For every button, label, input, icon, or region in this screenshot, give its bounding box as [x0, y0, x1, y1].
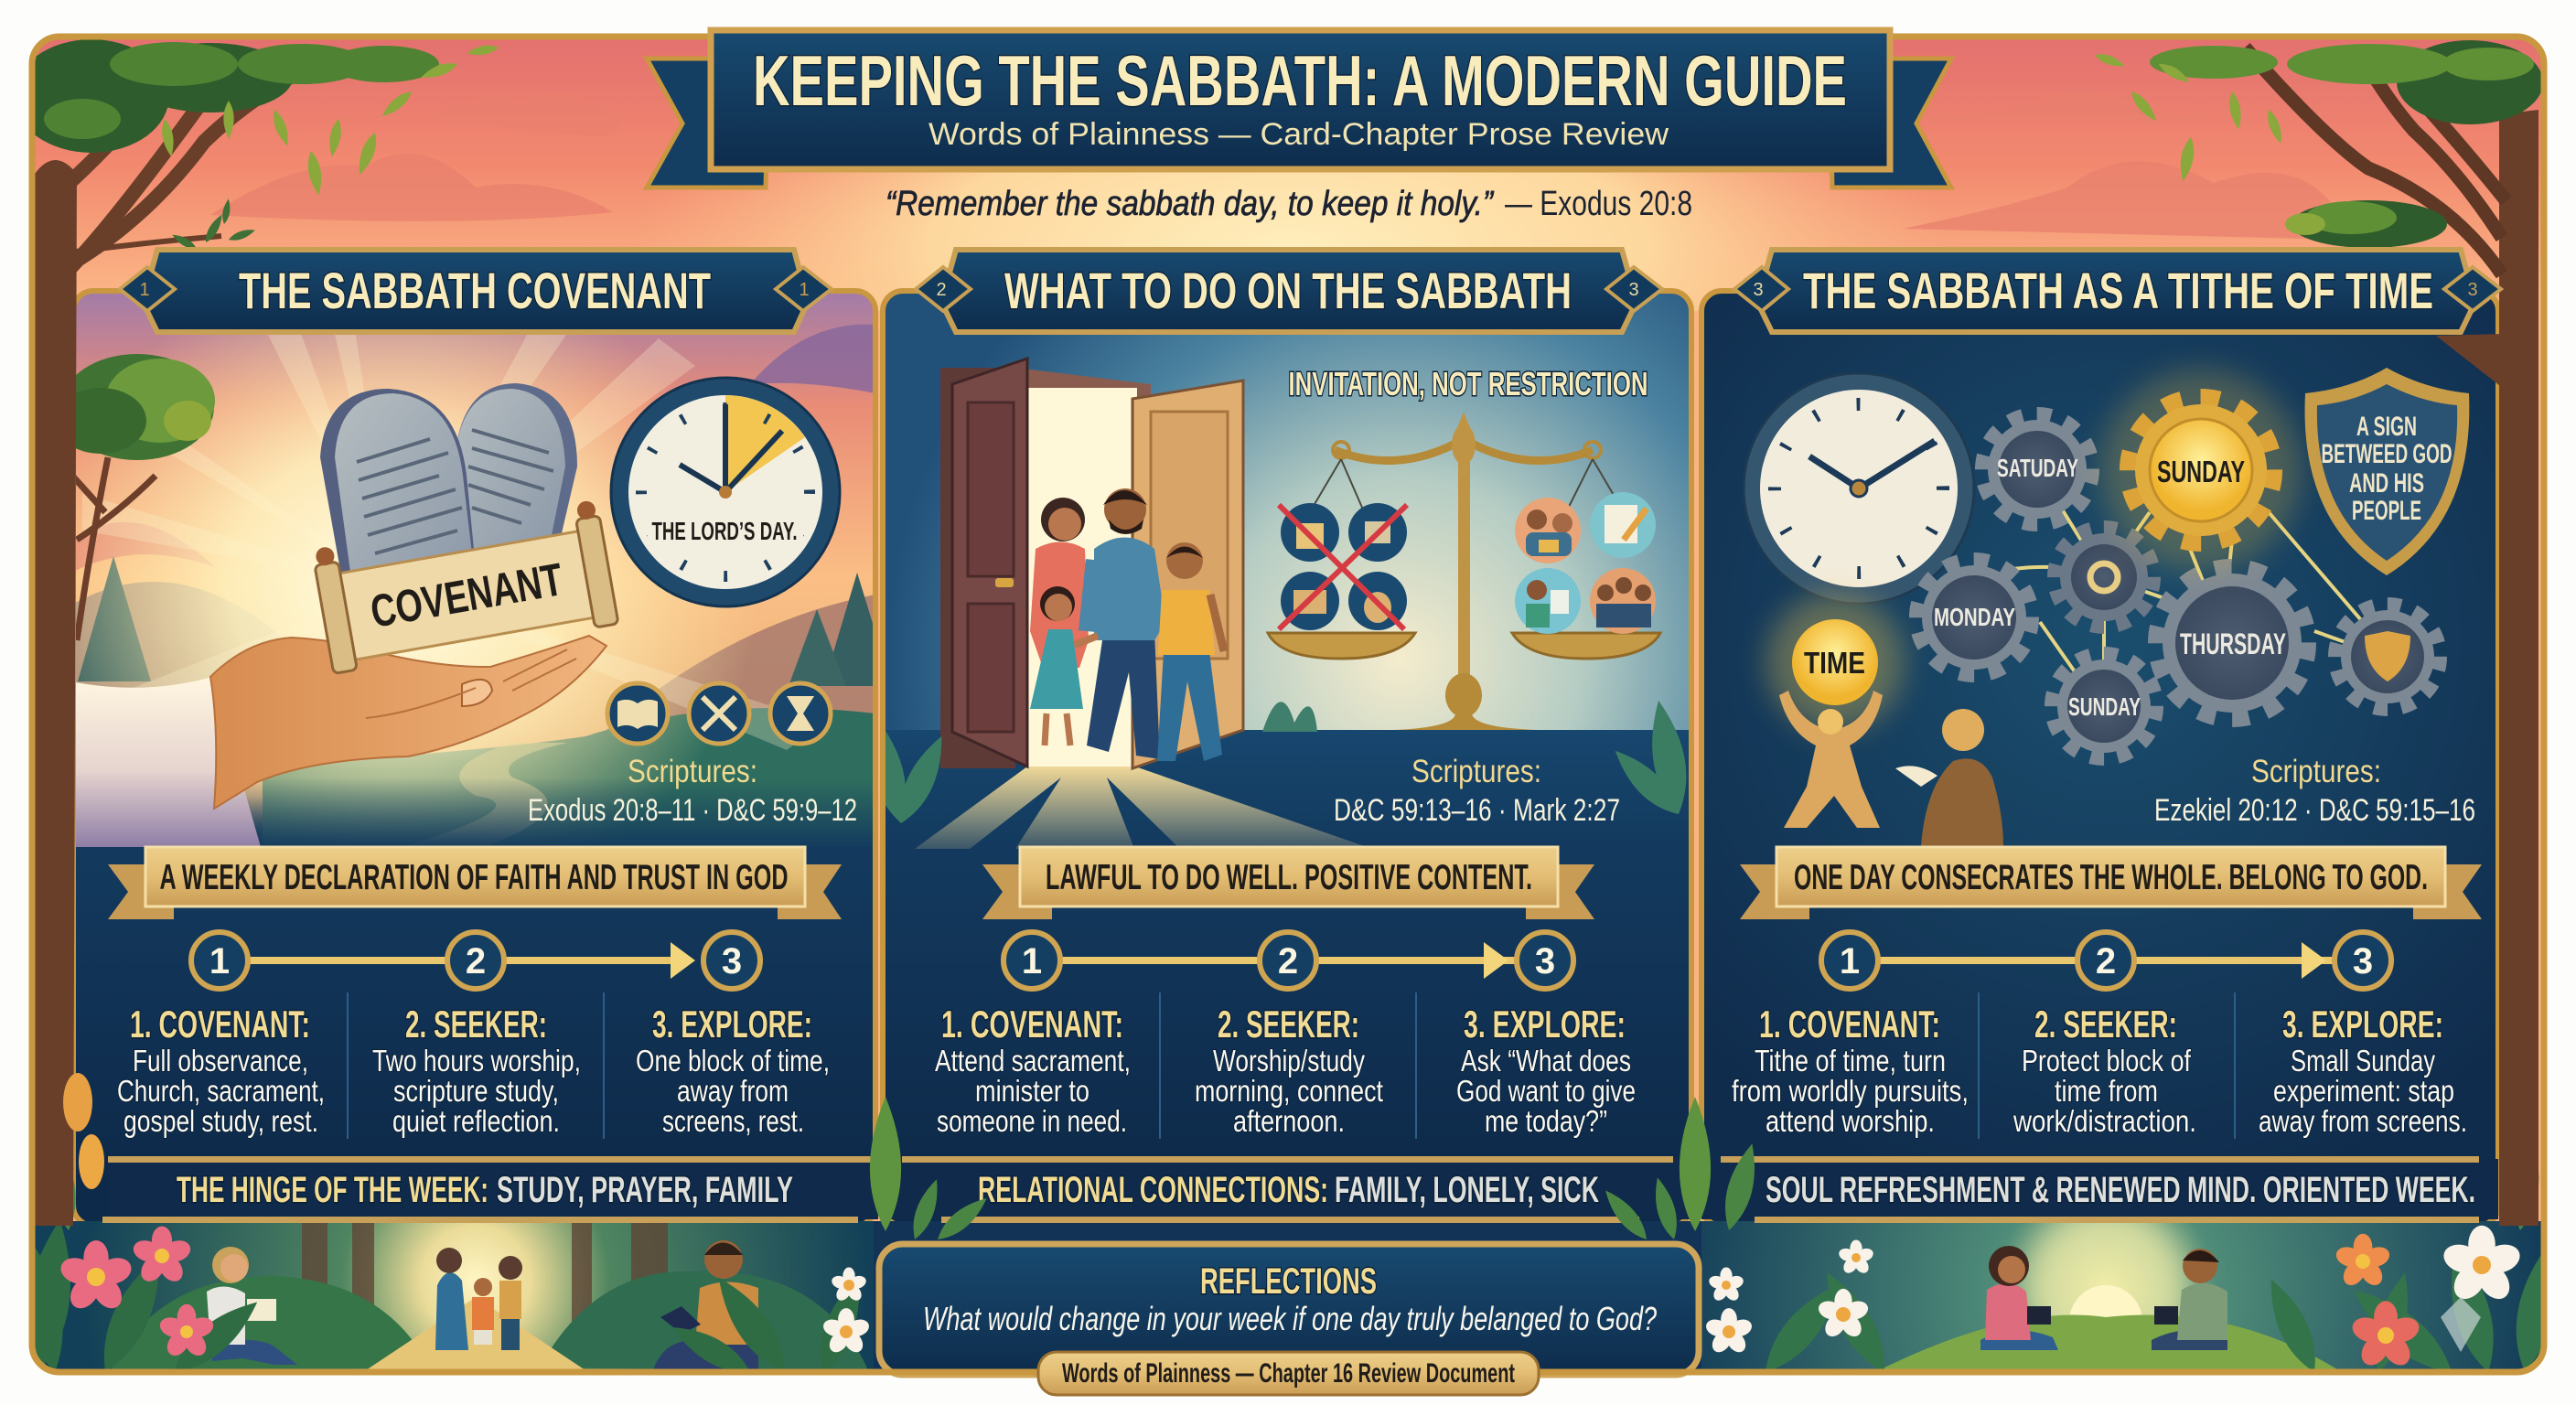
- steps: panel 3: Small Sunday: [2291, 1044, 2435, 1078]
- icon: gear blank: [2055, 528, 2153, 627]
- heading: the sabbath as a tithe of time: 3: [1753, 280, 1764, 300]
- heading: the sabbath as a tithe of time: [1734, 250, 2501, 332]
- steps: panel 3: work/distraction.: [2012, 1104, 2196, 1138]
- steps: panel 3: Protect block of: [2022, 1044, 2192, 1078]
- girl: [1030, 586, 1098, 745]
- steps: panel 3: experiment: stap: [2273, 1074, 2454, 1108]
- steps: panel 3: 3: [2353, 941, 2373, 981]
- bottom scene: forest family: [35, 1221, 874, 1368]
- steps: panel 2: [935, 932, 1636, 1139]
- scriptures text: [528, 754, 857, 828]
- steps: panel 3: time from: [2055, 1074, 2158, 1108]
- steps: panel 1: 1: [209, 941, 230, 981]
- scriptures text: Scriptures:: [2251, 754, 2381, 789]
- steps: panel 1: screens, rest.: [662, 1104, 804, 1138]
- icon: gear thursday: THURSDAY: [2180, 627, 2286, 660]
- person reading left: [207, 1247, 297, 1365]
- info strip: panel 2: RELATIONAL CONNECTIONS:: [978, 1170, 1328, 1210]
- icon: door: [940, 359, 1243, 768]
- icon: gear sunday gold: [2100, 370, 2302, 571]
- panel: what to do on the sabbath: [856, 291, 1694, 1226]
- reflections box: What would change in your week if one day truly belanged to God?: [923, 1300, 1657, 1337]
- steps: panel 2: someone in need.: [937, 1104, 1127, 1138]
- ribbon: weekly declaration: [108, 847, 842, 919]
- heading: the sabbath covenant: 1: [799, 280, 810, 300]
- scriptures text: Ezekiel 20:12 · D&C 59:15–16: [2154, 793, 2475, 828]
- icon: clock with Lord's day wedge: [611, 378, 840, 606]
- steps: panel 3: 2: [2096, 941, 2116, 981]
- icon: figure lifting time: [1766, 594, 1904, 828]
- heading: what to do on the sabbath: WHAT TO DO ON THE SABBATH: [1004, 262, 1572, 319]
- heading: the sabbath covenant: [120, 250, 832, 332]
- scriptures text: Scriptures:: [1411, 754, 1541, 789]
- scene: doorway and scale: [856, 291, 1694, 849]
- scripture quote: “Remember the sabbath day, to keep it holy.”: [886, 185, 1495, 223]
- steps: panel 2: 2: [1278, 941, 1298, 981]
- icon: hand and sleeve: [76, 636, 606, 847]
- icon: crossed tools badge: [689, 683, 749, 744]
- footer pill: Words of Plainness — Chapter 16 Review Document: [1062, 1358, 1515, 1389]
- scriptures text: Exodus 20:8–11 · D&C 59:9–12: [528, 793, 857, 828]
- icon: gear sunday small: SUNDAY: [2068, 692, 2141, 721]
- steps: panel 3: attend worship.: [1766, 1104, 1935, 1138]
- steps: panel 1: 2. SEEKER:: [405, 1003, 547, 1046]
- info strip: panel 1: STUDY, PRAYER, FAMILY: [497, 1170, 793, 1210]
- right tree: [2093, 40, 2543, 1226]
- steps: panel 1: 3. EXPLORE:: [652, 1003, 812, 1046]
- icon: gear sunday small: [2052, 654, 2156, 758]
- panel: the sabbath covenant: [27, 265, 892, 1226]
- info strip: panel 2: [883, 1156, 1692, 1223]
- steps: panel 1: 3: [722, 941, 742, 981]
- icon: open book badge: [607, 683, 668, 744]
- family on path: [435, 1248, 522, 1350]
- steps: panel 2: Ask “What does: [1461, 1044, 1631, 1078]
- steps: panel 1: Church, sacrament,: [117, 1074, 325, 1108]
- heading: what to do on the sabbath: 3: [1628, 280, 1639, 300]
- icon: gear with shield: [2335, 605, 2440, 709]
- steps: panel 1: scripture study,: [393, 1074, 559, 1108]
- steps: panel 2: afternoon.: [1233, 1104, 1345, 1138]
- icon: family walking through door: [1030, 488, 1224, 761]
- icon: gear monday: MONDAY: [1934, 603, 2015, 631]
- icon: wall clock: [1744, 373, 1974, 604]
- info strip: panel 3: [1701, 1156, 2498, 1223]
- steps: panel 3: 2. SEEKER:: [2034, 1003, 2177, 1046]
- steps: panel 2: 3: [1535, 941, 1555, 981]
- heading: the sabbath covenant: 1: [139, 280, 150, 300]
- steps: panel 2: minister to: [975, 1074, 1089, 1108]
- icon: gear saturday: SATUDAY: [1997, 454, 2078, 482]
- steps: panel 3: 1. COVENANT:: [1759, 1003, 1940, 1046]
- icon: connecting lines between gears: [2012, 469, 2378, 713]
- icon: plants: [856, 698, 1694, 829]
- person reading right: [653, 1240, 758, 1370]
- scroll label: COVENANT: [367, 553, 566, 638]
- ribbon: one day consecrates: [1740, 847, 2482, 919]
- info strip: panel 2: FAMILY, LONELY, SICK: [1335, 1170, 1599, 1210]
- title ribbon: [647, 30, 1951, 188]
- steps: panel 2: me today?”: [1485, 1104, 1607, 1138]
- scriptures text: [2154, 754, 2475, 828]
- steps: panel 1: 2: [466, 941, 486, 981]
- icon: small tree: [55, 354, 215, 640]
- icons: positive activities: [1515, 492, 1656, 634]
- steps: panel 2: Worship/study: [1213, 1044, 1365, 1078]
- steps: panel 3: away from screens.: [2259, 1104, 2467, 1138]
- icons: crossed-out activities: [1279, 503, 1407, 630]
- icon: gear saturday: [1982, 414, 2092, 524]
- side leaves: [44, 1097, 2545, 1246]
- left tree: [14, 39, 499, 1226]
- ribbon: lawful to do well: LAWFUL TO DO WELL. POSITIVE CONTENT.: [1046, 858, 1532, 897]
- steps: panel 1: 1. COVENANT:: [130, 1003, 310, 1046]
- steps: panel 1: quiet reflection.: [392, 1104, 560, 1138]
- icon: figure lifting time: TIME: [1804, 646, 1865, 680]
- icon: balance scale: [1268, 412, 1660, 730]
- icon: shield sign: BETWEED GOD: [2322, 439, 2452, 469]
- boy: [1157, 542, 1224, 761]
- caption: invitation not restriction: INVITATION, NOT RESTRICTION: [1288, 365, 1648, 402]
- icon: hourglass badge: [770, 683, 831, 744]
- icon: gear thursday: [2156, 567, 2308, 719]
- woman: [1030, 498, 1089, 668]
- clouds: [210, 166, 2331, 239]
- steps: panel 3: Tithe of time, turn: [1755, 1044, 1946, 1078]
- icon: shield sign: A SIGN: [2356, 412, 2417, 442]
- scene: sunrise landscape: [27, 265, 892, 1163]
- steps: panel 2: God want to give: [1456, 1074, 1636, 1108]
- heading: the sabbath covenant: THE SABBATH COVENANT: [239, 262, 711, 319]
- clock label: THE LORD’S DAY.: [651, 517, 798, 545]
- steps: panel 2: 3. EXPLORE:: [1464, 1003, 1626, 1046]
- footer pill: [1038, 1352, 1539, 1395]
- steps: panel 3: 1: [1840, 941, 1860, 981]
- steps: panel 3: [1732, 932, 2467, 1139]
- scriptures text: D&C 59:13–16 · Mark 2:27: [1334, 793, 1620, 828]
- ribbon: lawful to do well: [982, 847, 1594, 919]
- ribbon: weekly declaration: A WEEKLY DECLARATION OF FAITH AND TRUST IN GOD: [159, 858, 788, 897]
- steps: panel 1: away from: [677, 1074, 789, 1108]
- info strip: panel 1: THE HINGE OF THE WEEK:: [177, 1170, 488, 1210]
- icon: figure reading: [1895, 709, 2003, 846]
- title: KEEPING THE SABBATH: A MODERN GUIDE: [753, 40, 1847, 121]
- steps: panel 3: 3. EXPLORE:: [2282, 1003, 2443, 1046]
- flowers and leaves left: [7, 1217, 872, 1383]
- panel: the sabbath as a tithe of time: [1701, 291, 2498, 1226]
- woman reading: [1980, 1246, 2058, 1350]
- steps: panel 1: [117, 932, 830, 1139]
- man reading: [2152, 1249, 2227, 1350]
- icon: shield sign: PEOPLE: [2352, 496, 2421, 526]
- steps: panel 1: Two hours worship,: [372, 1044, 581, 1078]
- man: [1087, 488, 1165, 759]
- icon: shield sign: AND HIS: [2349, 468, 2424, 499]
- steps: panel 2: 2. SEEKER:: [1218, 1003, 1359, 1046]
- steps: panel 1: gospel study, rest.: [123, 1104, 318, 1138]
- steps: panel 2: morning, connect: [1195, 1074, 1383, 1108]
- heading: the sabbath as a tithe of time: 3: [2467, 280, 2478, 300]
- heading: what to do on the sabbath: 2: [936, 280, 947, 300]
- steps: panel 1: One block of time,: [636, 1044, 830, 1078]
- steps: panel 3: from worldly pursuits,: [1732, 1074, 1969, 1108]
- bottom centre navy: [874, 1221, 1701, 1375]
- subtitle: Words of Plainness — Card-Chapter Prose Review: [928, 117, 1669, 152]
- heading: what to do on the sabbath: [916, 250, 1662, 332]
- steps: panel 1: Full observance,: [133, 1044, 308, 1078]
- scripture quote: — Exodus 20:8: [1505, 185, 1692, 223]
- icon: gear monday: [1916, 560, 2032, 675]
- icon: gear sunday gold: SUNDAY: [2157, 455, 2245, 488]
- steps: panel 2: Attend sacrament,: [935, 1044, 1131, 1078]
- info strip: panel 1: [102, 1156, 878, 1223]
- steps: panel 2: 1. COVENANT:: [941, 1003, 1123, 1046]
- reflections box: REFLECTIONS: [1200, 1261, 1377, 1302]
- icon: shield sign: [2305, 368, 2469, 575]
- icon: stone tablets: [320, 383, 577, 585]
- scriptures text: [1334, 754, 1620, 828]
- scriptures text: Scriptures:: [628, 754, 757, 789]
- reflections box: [879, 1244, 1699, 1375]
- icon: covenant scroll: [312, 499, 618, 674]
- bottom scene: sunrise reading: [1701, 1221, 2541, 1368]
- flowers and leaves right: [1704, 1226, 2564, 1386]
- steps: panel 2: 1: [1022, 941, 1042, 981]
